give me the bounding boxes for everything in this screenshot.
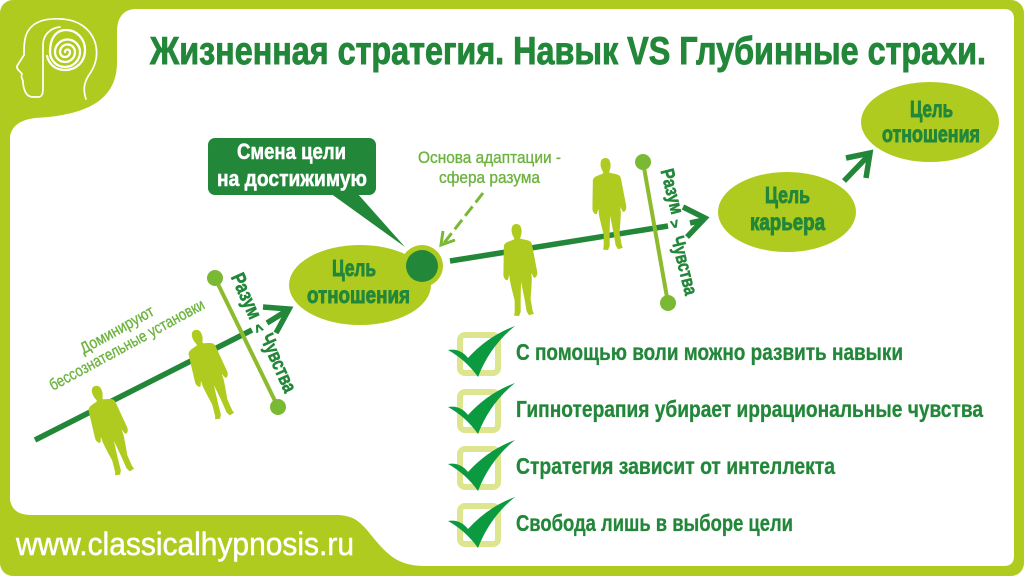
callout: change of goal: на достижимую [217, 166, 367, 191]
label: reason greater than feelings: Чувства [666, 234, 701, 298]
icon: head with spiral [17, 19, 97, 99]
marker: upper reason vs feelings bar [635, 154, 676, 311]
goal ellipse: relationships top [861, 82, 999, 162]
goal ellipse: relationships top: отношения [882, 121, 980, 147]
callout: change of goal [208, 138, 405, 247]
arrow: dashed to adaptation point [441, 193, 483, 245]
goal ellipse: relationships: Цель [332, 255, 376, 281]
goal ellipse: relationships: отношения [307, 282, 410, 308]
arrow: lower growth line [35, 307, 289, 440]
checklist item 1: С помощью воли можно развить навыки [516, 339, 903, 365]
label: reason less than feelings: Чувства [255, 330, 301, 397]
checklist item 3: Стратегия зависит от интеллекта [516, 453, 835, 479]
marker: lower reason vs feelings bar [207, 270, 286, 415]
website url: www.classicalhypnosis.ru [15, 526, 354, 562]
callout: change of goal: Смена цели [237, 139, 346, 164]
label: unconscious attitudes: Доминируют [77, 303, 158, 358]
goal ellipse: career: Цель [765, 182, 810, 208]
label: reason less than feelings: < [250, 321, 268, 335]
arrow: career to relationships [844, 153, 870, 181]
marker: adaptation point [401, 245, 443, 287]
checklist item 4 [448, 497, 793, 548]
label: unconscious attitudes: бессознательные установки [47, 296, 208, 394]
label: reason greater than feelings: > [666, 218, 684, 230]
label: adaptation basis: Основа адаптации - [418, 148, 561, 167]
goal ellipse: career [718, 172, 856, 252]
checklist item 1 [448, 326, 903, 377]
label: reason greater than feelings [656, 167, 701, 298]
label: reason less than feelings [226, 270, 301, 397]
checklist item 4: Свобода лишь в выборе цели [516, 510, 793, 536]
figure: person 4 [588, 157, 630, 251]
label: reason greater than feelings: Разум [656, 167, 687, 216]
label: adaptation basis: сфера разума [439, 168, 540, 187]
figure: person 1 [79, 380, 141, 479]
figure: person 3 [499, 223, 541, 317]
checklist item 3 [448, 440, 835, 491]
goal ellipse: relationships top: Цель [910, 96, 953, 122]
checklist item 2 [448, 383, 983, 434]
label: reason less than feelings: Разум [226, 270, 266, 323]
figure: person 2 [179, 324, 241, 423]
goal ellipse: relationships [289, 245, 431, 325]
label: adaptation basis [418, 148, 561, 187]
goal ellipse: career: карьера [750, 209, 825, 235]
arrow: middle growth line [450, 207, 705, 261]
